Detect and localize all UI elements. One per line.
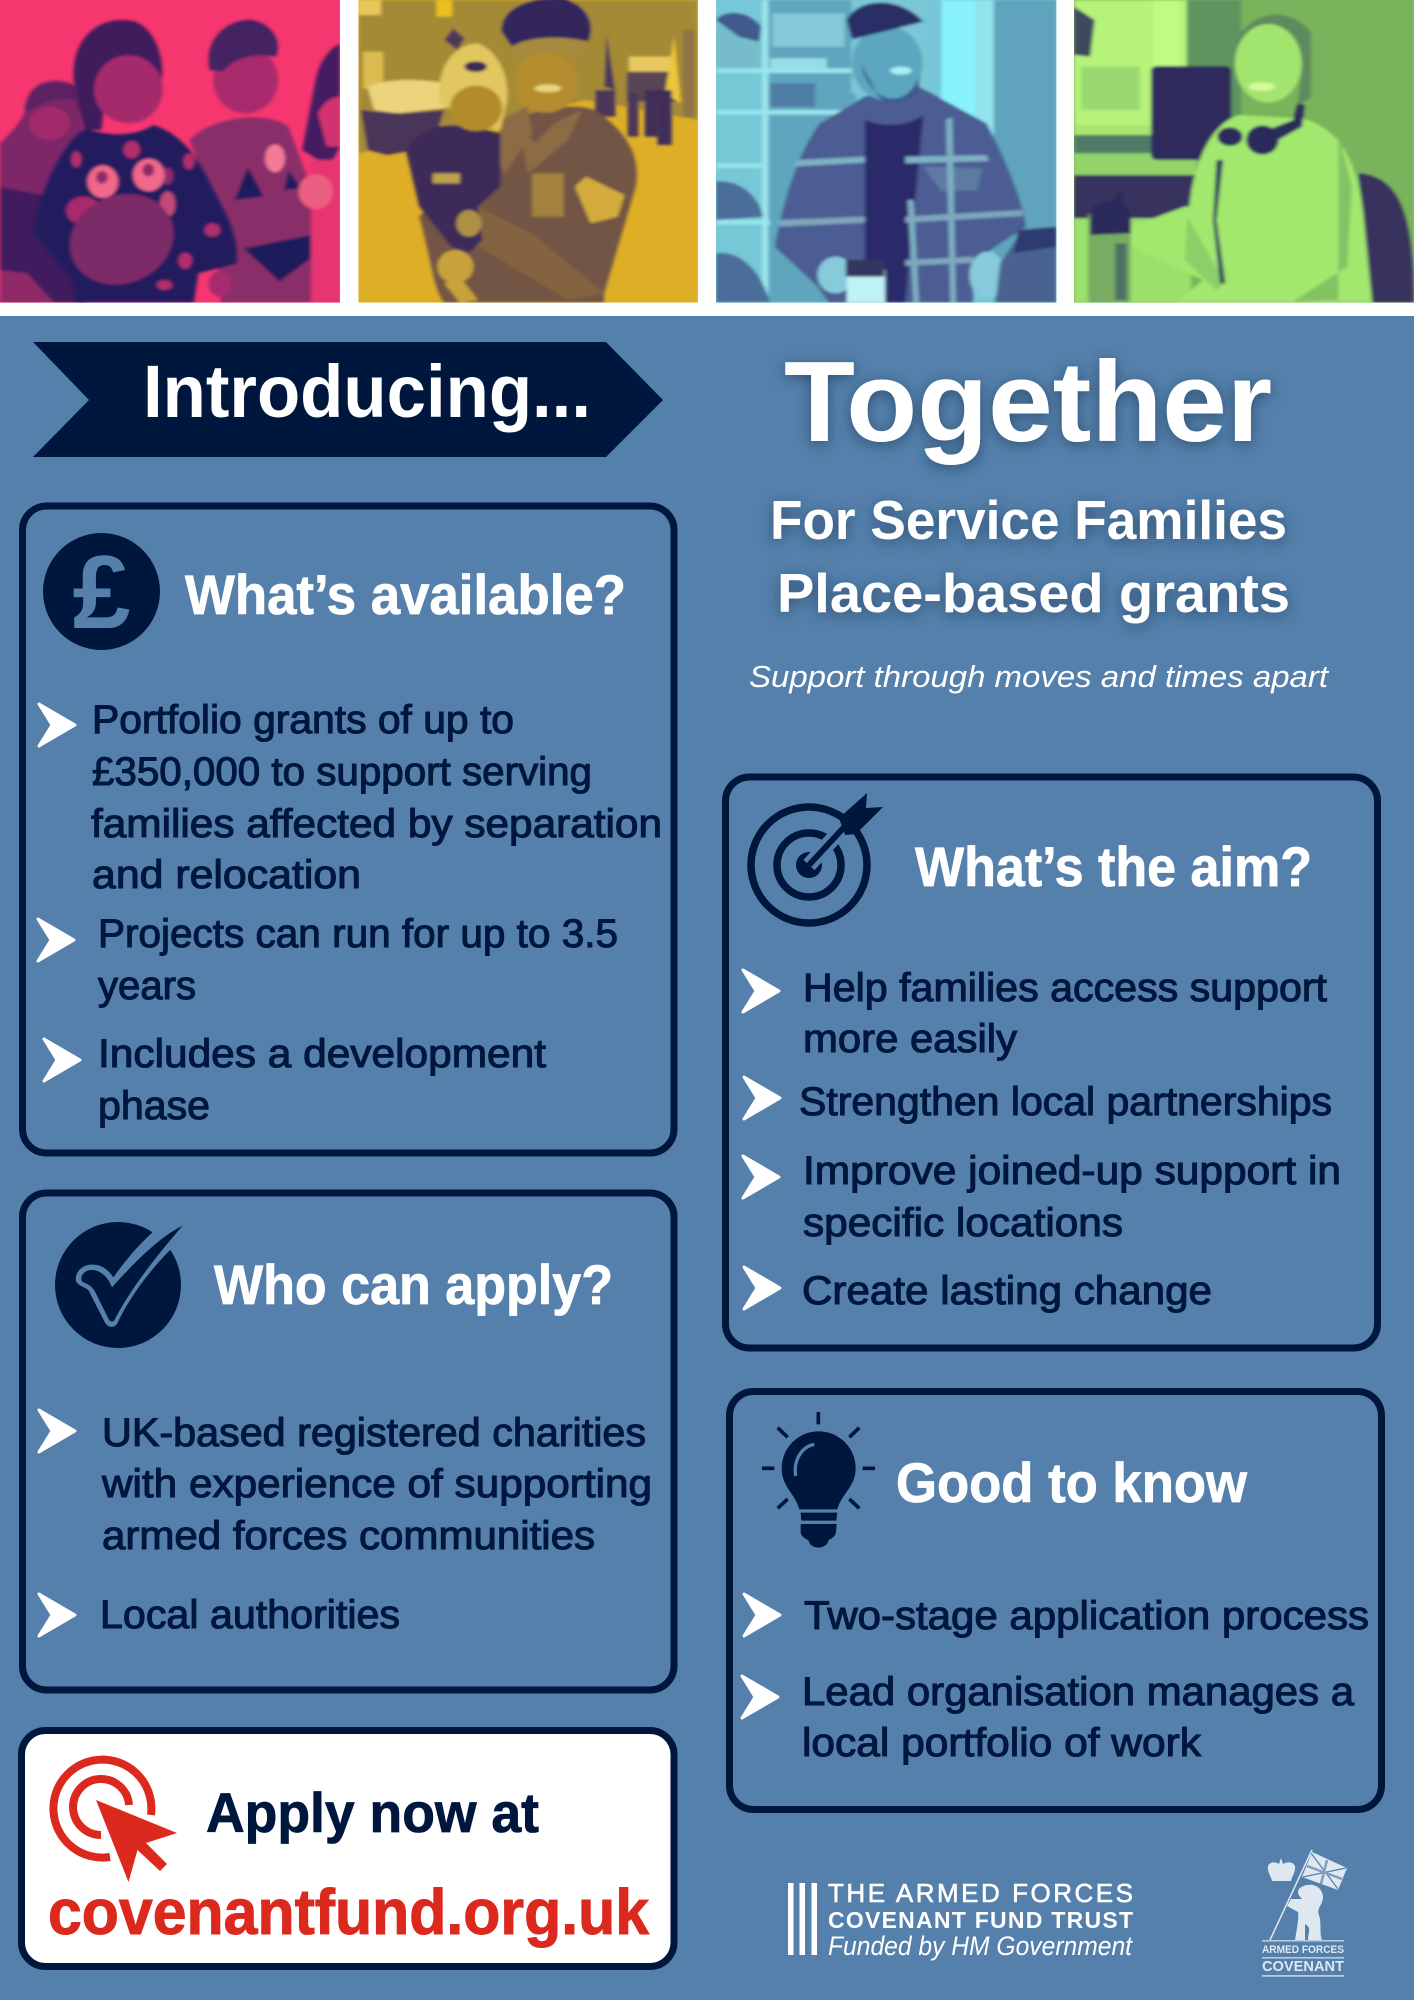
panel frame (22, 1193, 674, 1690)
bullet icon (44, 1039, 80, 1081)
bullet: project length: years (98, 964, 196, 1008)
line (1262, 1975, 1344, 1977)
bullet: access support: Help families access support (803, 966, 1327, 1010)
subtitle line 2: Place-based grants (777, 562, 1290, 624)
panel: who can apply (22, 1193, 674, 1690)
icon: pound coin: £ (73, 535, 130, 651)
subtitle line 1: For Service Families (770, 489, 1287, 551)
bullet: project length: Projects can run for up to 3.5 (98, 912, 618, 956)
bullet: access support: more easily (803, 1017, 1017, 1061)
bullet icon (744, 1594, 780, 1636)
bullet: charities: with experience of supporting (101, 1462, 652, 1506)
heading: What’s the aim? (915, 835, 1312, 898)
logo: Armed Forces Covenant Fund Trust: Funded by HM Government (828, 1931, 1133, 1961)
photo: man with mug in cyan duotone (716, 0, 1056, 303)
banner: Introducing (33, 342, 663, 457)
icon: lion (1287, 1885, 1323, 1940)
bullet: charities: armed forces communities (102, 1514, 595, 1558)
label: armed forces: ARMED FORCES (1262, 1944, 1344, 1956)
panel: what's the aim (726, 777, 1378, 1348)
bullet: partnerships: Strengthen local partnerships (799, 1080, 1332, 1124)
bullet: portfolio grants: £350,000 to support serving (92, 750, 592, 794)
title block (770, 339, 1290, 624)
panel frame (22, 506, 674, 1153)
bullet: charities: UK-based registered charities (102, 1411, 646, 1455)
logo: Armed Forces Covenant Fund Trust (788, 1878, 1133, 1961)
bullet icon (38, 919, 74, 961)
bullet: access support (803, 966, 1327, 1061)
icon: crown (1268, 1858, 1295, 1881)
bullet: lead organisation (802, 1670, 1355, 1765)
bullet: portfolio grants: Portfolio grants of up to (92, 698, 514, 742)
bullet: lasting change: Create lasting change (802, 1269, 1212, 1313)
bullet: lead organisation: local portfolio of work (802, 1721, 1202, 1765)
bullet icon (39, 1594, 75, 1636)
heading: What’s available? (185, 563, 626, 626)
bullet: charities (101, 1411, 652, 1558)
panel frame (726, 777, 1378, 1348)
panel: what's available (22, 506, 674, 1153)
bullet icon (744, 1077, 780, 1119)
panel frame (22, 1730, 674, 1966)
call to action: Apply now at (206, 1781, 539, 1844)
tagline: Support through moves and times apart (749, 659, 1329, 694)
icon: pound coin (43, 533, 160, 651)
website address: covenantfund.org.uk (48, 1876, 649, 1948)
photo: children in pink duotone (0, 0, 340, 303)
bullet: portfolio grants: families affected by separation (91, 802, 662, 846)
logo: Armed Forces Covenant (1262, 1850, 1347, 1977)
bullet icon (39, 1410, 75, 1452)
logo: Armed Forces Covenant Fund Trust: THE ARMED FORCES (828, 1878, 1133, 1908)
photo: soldier with baby in yellow duotone (358, 0, 698, 303)
bullet: portfolio grants (91, 698, 662, 897)
bullet icon (743, 970, 779, 1012)
bullet icon (743, 1156, 779, 1198)
bullet: joined-up support (803, 1149, 1341, 1245)
icon: union flag (1302, 1852, 1347, 1890)
logo: Armed Forces Covenant Fund Trust: COVENANT FUND TRUST (828, 1907, 1133, 1933)
icon: light bulb (762, 1412, 875, 1548)
heading: Who can apply? (214, 1253, 613, 1316)
bullet: two-stage process: Two-stage application process (804, 1594, 1369, 1638)
line (1262, 1957, 1344, 1959)
bullet: development phase (98, 1032, 546, 1128)
bullet: development phase: phase (98, 1084, 210, 1128)
bullet: local authorities: Local authorities (100, 1593, 400, 1637)
heading: Good to know (896, 1451, 1247, 1514)
panel: apply now (22, 1730, 674, 1966)
bullet icon (744, 1267, 780, 1309)
bullet: joined-up support: Improve joined-up support in (803, 1149, 1341, 1193)
bullet: project length (98, 912, 618, 1008)
bullet icon (39, 704, 75, 746)
bullet: joined-up support: specific locations (803, 1201, 1123, 1245)
bullet: portfolio grants: and relocation (92, 853, 361, 897)
line (1262, 1940, 1344, 1942)
title: Together: Together (784, 339, 1272, 466)
bullet: development phase: Includes a development (98, 1032, 546, 1076)
icon: flag pole (1270, 1850, 1312, 1940)
panel: good to know (730, 1392, 1382, 1810)
panel frame (730, 1392, 1382, 1810)
icon: check mark (55, 1222, 183, 1348)
bullet icon (742, 1676, 778, 1718)
icon: target with arrow (751, 793, 883, 923)
icon: cursor clicking target (53, 1760, 177, 1882)
bullet: lead organisation: Lead organisation manages a (802, 1670, 1355, 1714)
banner: Introducing: Introducing... (143, 350, 591, 433)
photo: woman at desk in green duotone (1074, 0, 1414, 303)
label: covenant: COVENANT (1262, 1958, 1344, 1975)
